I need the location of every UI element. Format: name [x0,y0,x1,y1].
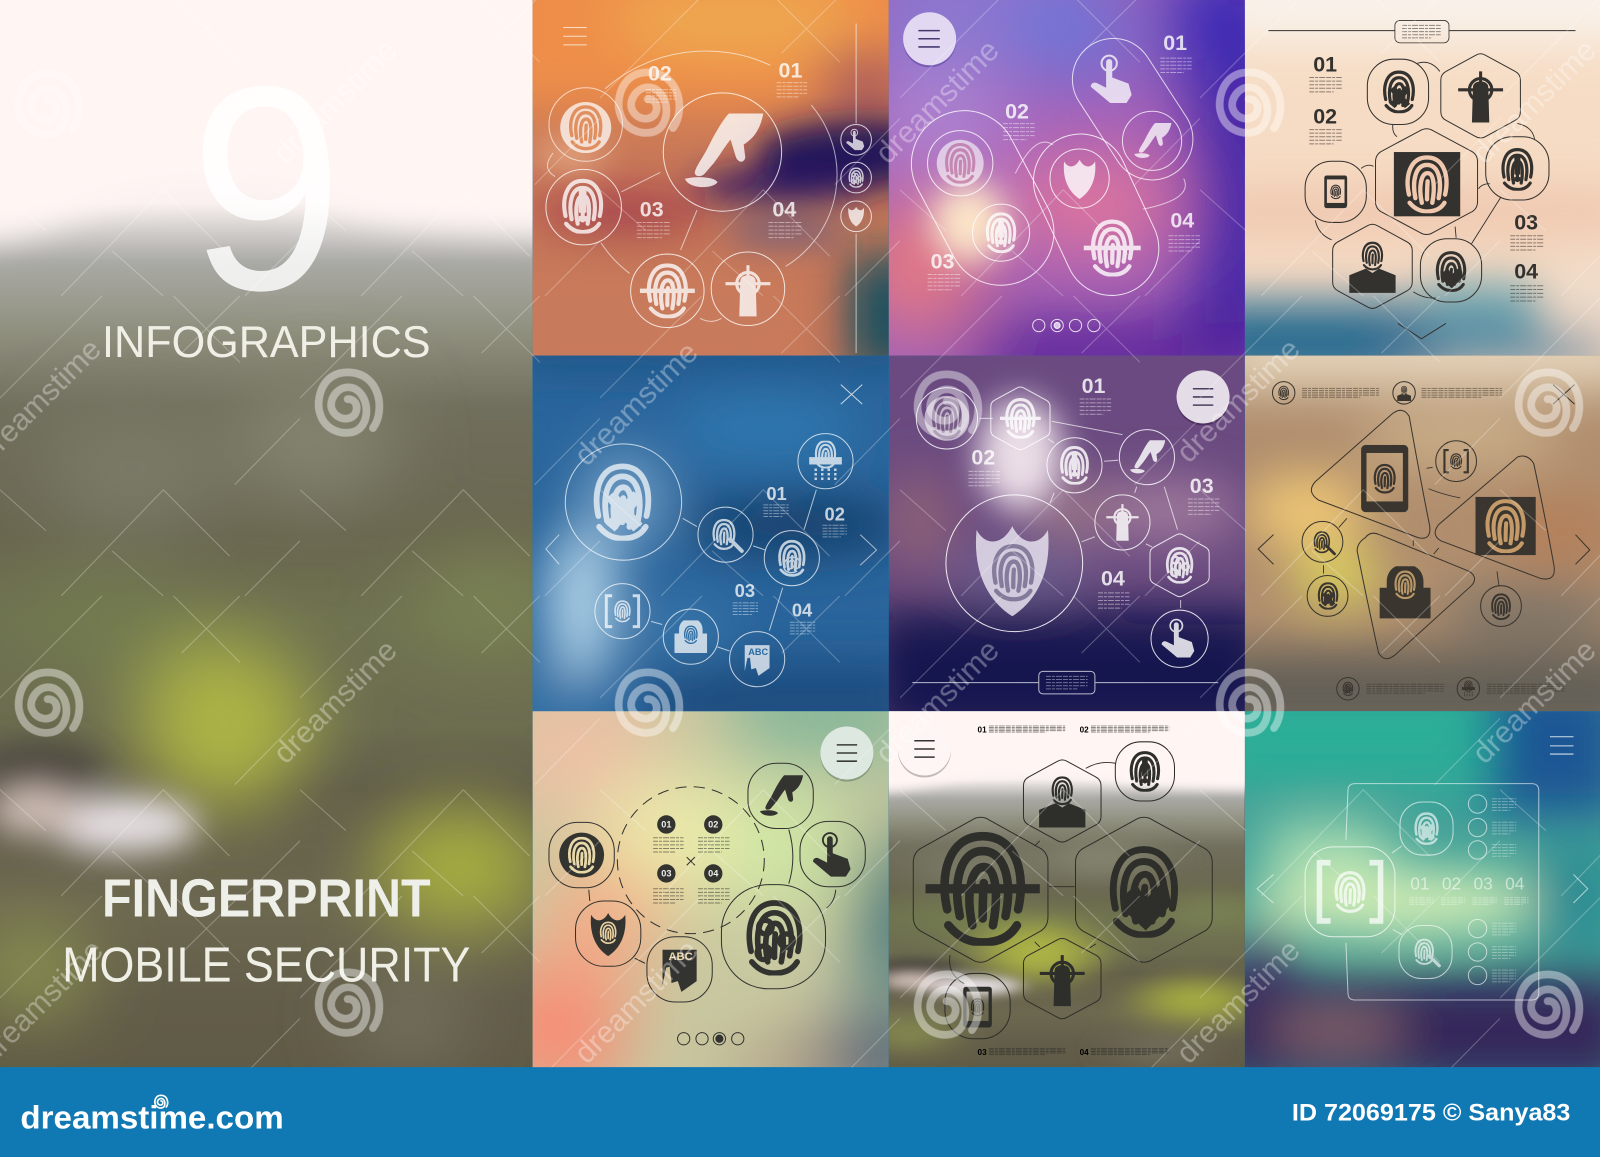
icon: logo spiral [155,1095,168,1108]
panel 2: purple capsules [888,0,1245,356]
small fingerprint circles [1302,441,1521,627]
icon: fingerprint press [663,93,782,211]
connector arcs [547,23,856,353]
panel 1: orange sunset circles [532,0,889,356]
curved connector [1015,142,1185,209]
header captions [978,726,1169,735]
connector arrows [651,490,816,651]
labels 01-04 [928,31,1200,290]
pagination dots [1033,319,1100,332]
panel: cover background with title [0,0,533,1068]
dashed ring [617,787,764,934]
number badges: 02 [708,820,718,830]
header captions: 02 [1080,726,1089,735]
footer mini items [1337,678,1565,700]
icons: chevrons [1257,874,1588,903]
labels 01-04: 02 [1005,99,1029,123]
labels 01-04 [733,483,847,634]
number badges: 01 [661,820,671,830]
heading: fingerprint: FINGERPRINT [102,868,431,928]
labels 01-04: 03 [640,197,664,221]
hexagons with icons [913,742,1212,1039]
numbered labels: 01 [1410,874,1429,894]
menu button [820,727,873,782]
fingerprint icon chain [595,434,853,687]
triangle: fingerprint square [1435,456,1554,579]
labels 01-04 [968,374,1219,608]
labels 01-04: 02 [1313,104,1337,128]
blobs with icons: ABC [668,951,693,963]
icon: close [841,385,862,404]
footer captions: 04 [1080,1048,1089,1057]
labels 01-04: 01 [1313,52,1337,76]
labels 01-04: 02 [648,62,672,86]
arrows between icons [1315,62,1535,298]
menu button [898,722,951,778]
footer captions [978,1048,1169,1057]
connector arrows [589,830,836,963]
labels 01-04: 04 [1514,260,1538,284]
menu button [1177,370,1230,425]
labels 01-04 [637,59,807,238]
panel 5: purple network with shield [867,355,1276,741]
labels 01-04: 01 [1082,374,1106,398]
labels 01-04: 02 [971,445,995,469]
footer captions: 03 [978,1048,987,1057]
number badges: 03 [661,868,671,878]
connector lines [950,762,1115,984]
side icons [841,124,871,232]
icon: fingerprint scan [631,254,704,328]
labels 01-04: 03 [1190,474,1214,498]
labels 01-04 [1309,52,1544,301]
icons: fingerprint x and search [1399,802,1453,979]
watermark lattice and spirals: dreamstime [568,933,705,1070]
numbered labels: 04 [1505,874,1525,894]
labels 01-04: 01 [1163,31,1187,55]
labels 01-04: 03 [931,249,955,273]
labels 01-04: 04 [1170,209,1194,233]
numbered labels: 02 [1442,874,1461,894]
watermark lattice and spirals: dreamstime [1170,332,1307,469]
panel 6: tan triangles [1204,316,1600,741]
connected icons [916,387,1209,667]
triangle: phone [1311,410,1430,538]
icon: hamburger menu [563,28,587,45]
icon: fingerprint alert [546,169,621,245]
number badges [653,815,730,903]
header rule and note [1268,20,1576,43]
capsule: right [1032,134,1160,296]
footer rule and note [912,671,1218,694]
footer bar [0,1067,1600,1157]
labels 01-04: 04 [1101,567,1125,591]
triangle: arched fingerprint [1357,533,1475,659]
menu button [903,12,956,67]
heading: mobile security: MOBILE SECURITY [62,939,470,993]
watermark lattice and spirals: dreamstime [267,33,404,170]
watermark lattice and spirals: dreamstime [869,633,1006,770]
fingerprint icon chain: @ [782,553,802,575]
connector lines [980,418,1181,608]
labels 01-04: 02 [824,503,845,524]
icon: hamburger menu [1550,737,1573,754]
labels 01-04: 01 [766,483,787,504]
rounded frame [1346,784,1539,1000]
panel 8: landscape hexagons [848,691,1298,1067]
labels 01-04: 04 [772,197,796,221]
watermark lattice and spirals: dreamstime [267,633,404,770]
watermark lattice and spirals: dreamstime [1466,633,1600,770]
big number 9: 9 [190,26,343,351]
heading: infographics: INFOGRAPHICS [102,316,431,367]
icons: chevrons [546,535,877,565]
watermark lattice and spirals: dreamstime [1170,933,1307,1070]
watermark lattice and spirals: dreamstime [1466,33,1600,170]
icons: chevrons [1258,535,1590,564]
connector lines [1323,467,1499,586]
shield fingerprint [946,495,1083,632]
numbered labels [1409,874,1529,905]
connector arrows [1392,846,1402,935]
icon: target finger [711,252,785,325]
capsule: left [910,110,1054,286]
labels 01-04: 03 [1514,211,1538,235]
panel 7: green-salmon blobs [485,673,949,1102]
icon: chevron down [1398,323,1446,339]
labels 01-04: 03 [735,580,755,601]
big fingerprint with cross [565,444,682,560]
watermark lattice and spirals: dreamstime [568,335,705,472]
capsule: top [1072,38,1194,180]
image id and author: ID 72069175 © Sanya83 [1292,1099,1570,1126]
fingerprint icon chain: ABC [748,647,768,657]
watermark lattice and spirals: dreamstime [869,33,1006,170]
header mini items [1272,382,1502,404]
panel 3: peach hexagons [1194,0,1600,384]
panel 4: blue circles [510,327,918,735]
labels 01-04: 01 [779,59,802,83]
panel 9: teal dashboard [1204,673,1600,1087]
footer logo: dreamstime.com [20,1099,284,1136]
icon: close [1553,385,1574,404]
labels 01-04: 04 [792,599,813,620]
blobs with icons [549,763,865,1002]
number badges: 04 [708,868,719,878]
numbered labels: 03 [1473,874,1493,894]
header captions: 01 [978,726,987,735]
network of fingerprint icons [1305,54,1549,308]
icon: bracket fingerprint [1305,847,1395,937]
pagination dots [678,1033,744,1045]
icon: fingerprint disc [549,88,622,161]
mini icon lists [1468,795,1516,985]
